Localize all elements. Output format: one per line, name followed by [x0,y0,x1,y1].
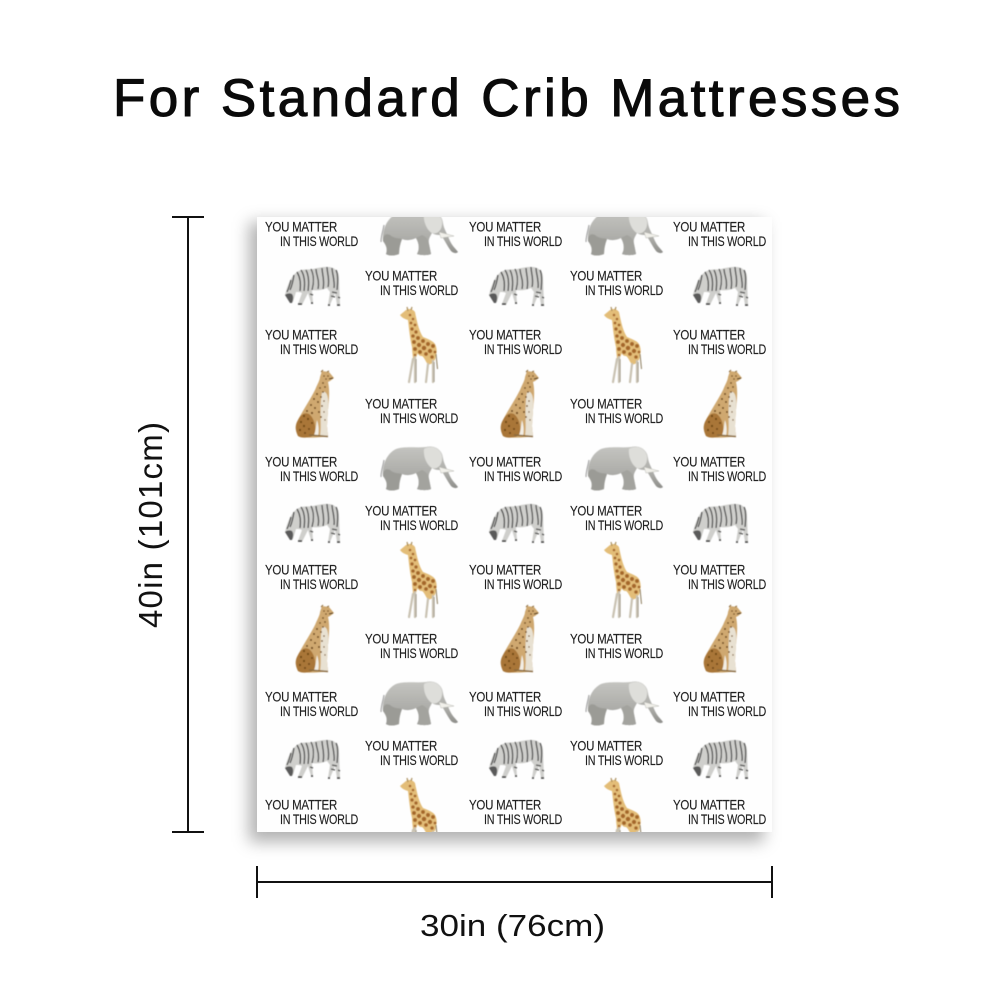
slogan text pattern: YOU MATTER [365,738,437,754]
slogan text pattern [265,218,766,827]
slogan text pattern: IN THIS WORLD [688,341,766,357]
slogan text pattern: IN THIS WORLD [380,752,458,768]
slogan text pattern: YOU MATTER [469,796,541,812]
slogan text pattern: IN THIS WORLD [484,811,562,827]
slogan text pattern: IN THIS WORLD [688,576,766,592]
zebra row 1 [285,267,748,305]
giraffe row 1 [400,307,642,382]
slogan text pattern: IN THIS WORLD [688,703,766,719]
slogan text pattern: IN THIS WORLD [484,233,562,249]
slogan text pattern: YOU MATTER [570,502,642,518]
slogan text pattern: YOU MATTER [265,796,337,812]
slogan text pattern: IN THIS WORLD [688,468,766,484]
cheetah row 1 [296,370,742,438]
slogan text pattern: YOU MATTER [673,688,745,704]
slogan text pattern: IN THIS WORLD [380,282,458,298]
slogan text pattern: IN THIS WORLD [380,410,458,426]
slogan text pattern: YOU MATTER [365,268,437,284]
zebra row 3 [285,740,748,778]
slogan text pattern: YOU MATTER [570,630,642,646]
slogan text pattern: YOU MATTER [469,326,541,342]
slogan text pattern: YOU MATTER [570,396,642,412]
slogan text pattern: IN THIS WORLD [484,341,562,357]
slogan text pattern: YOU MATTER [265,326,337,342]
slogan text pattern: IN THIS WORLD [688,811,766,827]
slogan text pattern: IN THIS WORLD [585,410,663,426]
slogan text pattern: YOU MATTER [265,454,337,470]
slogan text pattern: YOU MATTER [570,738,642,754]
giraffe row 2 [400,542,642,617]
slogan text pattern: YOU MATTER [365,396,437,412]
slogan text pattern: IN THIS WORLD [585,752,663,768]
slogan text pattern: YOU MATTER [673,454,745,470]
width label: 30in (76cm) [420,908,605,943]
slogan text pattern: YOU MATTER [265,562,337,578]
slogan text pattern: IN THIS WORLD [280,341,358,357]
title: For Standard Crib Mattresses [113,69,900,128]
slogan text pattern: YOU MATTER [570,268,642,284]
slogan text pattern: YOU MATTER [365,630,437,646]
slogan text pattern: IN THIS WORLD [585,517,663,533]
elephant row 3 [381,681,663,726]
slogan text pattern: YOU MATTER [469,688,541,704]
slogan text pattern: IN THIS WORLD [280,811,358,827]
slogan text pattern: YOU MATTER [265,688,337,704]
elephant row 1 [381,211,663,256]
slogan text pattern: YOU MATTER [673,562,745,578]
slogan text pattern: YOU MATTER [673,796,745,812]
slogan text pattern: YOU MATTER [469,218,541,234]
slogan text pattern: YOU MATTER [469,562,541,578]
slogan text pattern: YOU MATTER [365,502,437,518]
slogan text pattern: IN THIS WORLD [585,645,663,661]
slogan text pattern: IN THIS WORLD [688,233,766,249]
slogan text pattern: IN THIS WORLD [484,703,562,719]
slogan text pattern: IN THIS WORLD [380,517,458,533]
width dimension marker [257,866,772,898]
height label: 40in (101cm) [132,422,169,628]
slogan text pattern: YOU MATTER [673,218,745,234]
zebra row 2 [285,504,748,542]
slogan text pattern: IN THIS WORLD [280,233,358,249]
cheetah row 2 [296,605,742,673]
slogan text pattern: IN THIS WORLD [280,576,358,592]
blanket shadow [249,222,764,842]
slogan text pattern: IN THIS WORLD [380,645,458,661]
slogan text pattern: YOU MATTER [469,454,541,470]
slogan text pattern: IN THIS WORLD [585,282,663,298]
slogan text pattern: YOU MATTER [265,218,337,234]
slogan text pattern: IN THIS WORLD [484,576,562,592]
slogan text pattern: IN THIS WORLD [280,468,358,484]
slogan text pattern: IN THIS WORLD [280,703,358,719]
blanket panel [257,211,772,853]
slogan text pattern: YOU MATTER [673,326,745,342]
slogan text pattern: IN THIS WORLD [484,468,562,484]
giraffe row 3 [400,777,642,832]
height dimension marker [172,217,204,832]
elephant row 2 [381,446,663,490]
